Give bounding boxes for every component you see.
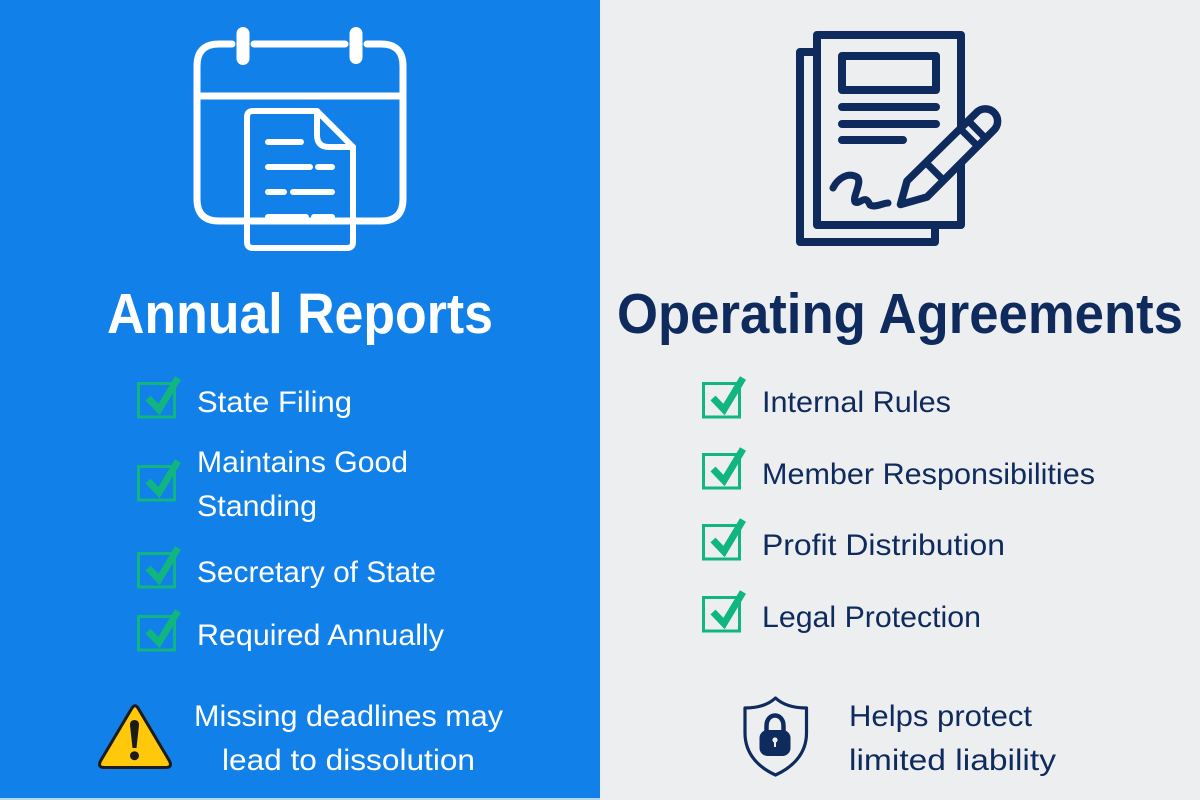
item: internal rules: Internal Rules <box>762 386 951 419</box>
icon: shield with lock <box>745 698 806 775</box>
item: legal protection: Legal Protection <box>762 601 981 634</box>
item: profit distribution: Profit Distribution <box>762 529 1005 562</box>
item: secretary of state: Secretary of State <box>197 556 436 589</box>
panel: operating agreements <box>600 0 1200 800</box>
item: secretary of state <box>138 548 436 589</box>
callout: limited liability: Helps protect <box>849 700 1033 733</box>
item: profit distribution <box>704 520 1005 562</box>
item: member responsibilities <box>704 449 1095 491</box>
callout: missing deadlines: lead to dissolution <box>222 744 475 777</box>
callout: limited liability <box>849 700 1056 777</box>
checklist: operating agreements <box>704 378 1095 634</box>
item: legal protection <box>704 592 981 634</box>
item: required annually <box>138 611 444 652</box>
item: maintains good standing <box>138 446 408 523</box>
icon: warning triangle <box>100 706 170 768</box>
item: maintains good standing: Standing <box>197 490 317 523</box>
item: internal rules <box>704 378 951 419</box>
item: state filing <box>138 378 352 419</box>
icon: document with pen <box>800 35 998 242</box>
heading: annual reports: Annual Reports <box>107 282 493 346</box>
checklist: annual reports <box>138 378 444 652</box>
item: maintains good standing: Maintains Good <box>197 446 408 479</box>
callout: missing deadlines <box>194 700 503 777</box>
item: member responsibilities: Member Responsibilities <box>762 458 1095 491</box>
item: required annually: Required Annually <box>197 619 444 652</box>
panel: annual reports <box>0 0 600 800</box>
callout: limited liability: limited liability <box>849 744 1056 777</box>
item: state filing: State Filing <box>197 386 352 419</box>
icon: calendar with document <box>197 34 403 248</box>
callout: missing deadlines: Missing deadlines may <box>194 700 503 733</box>
